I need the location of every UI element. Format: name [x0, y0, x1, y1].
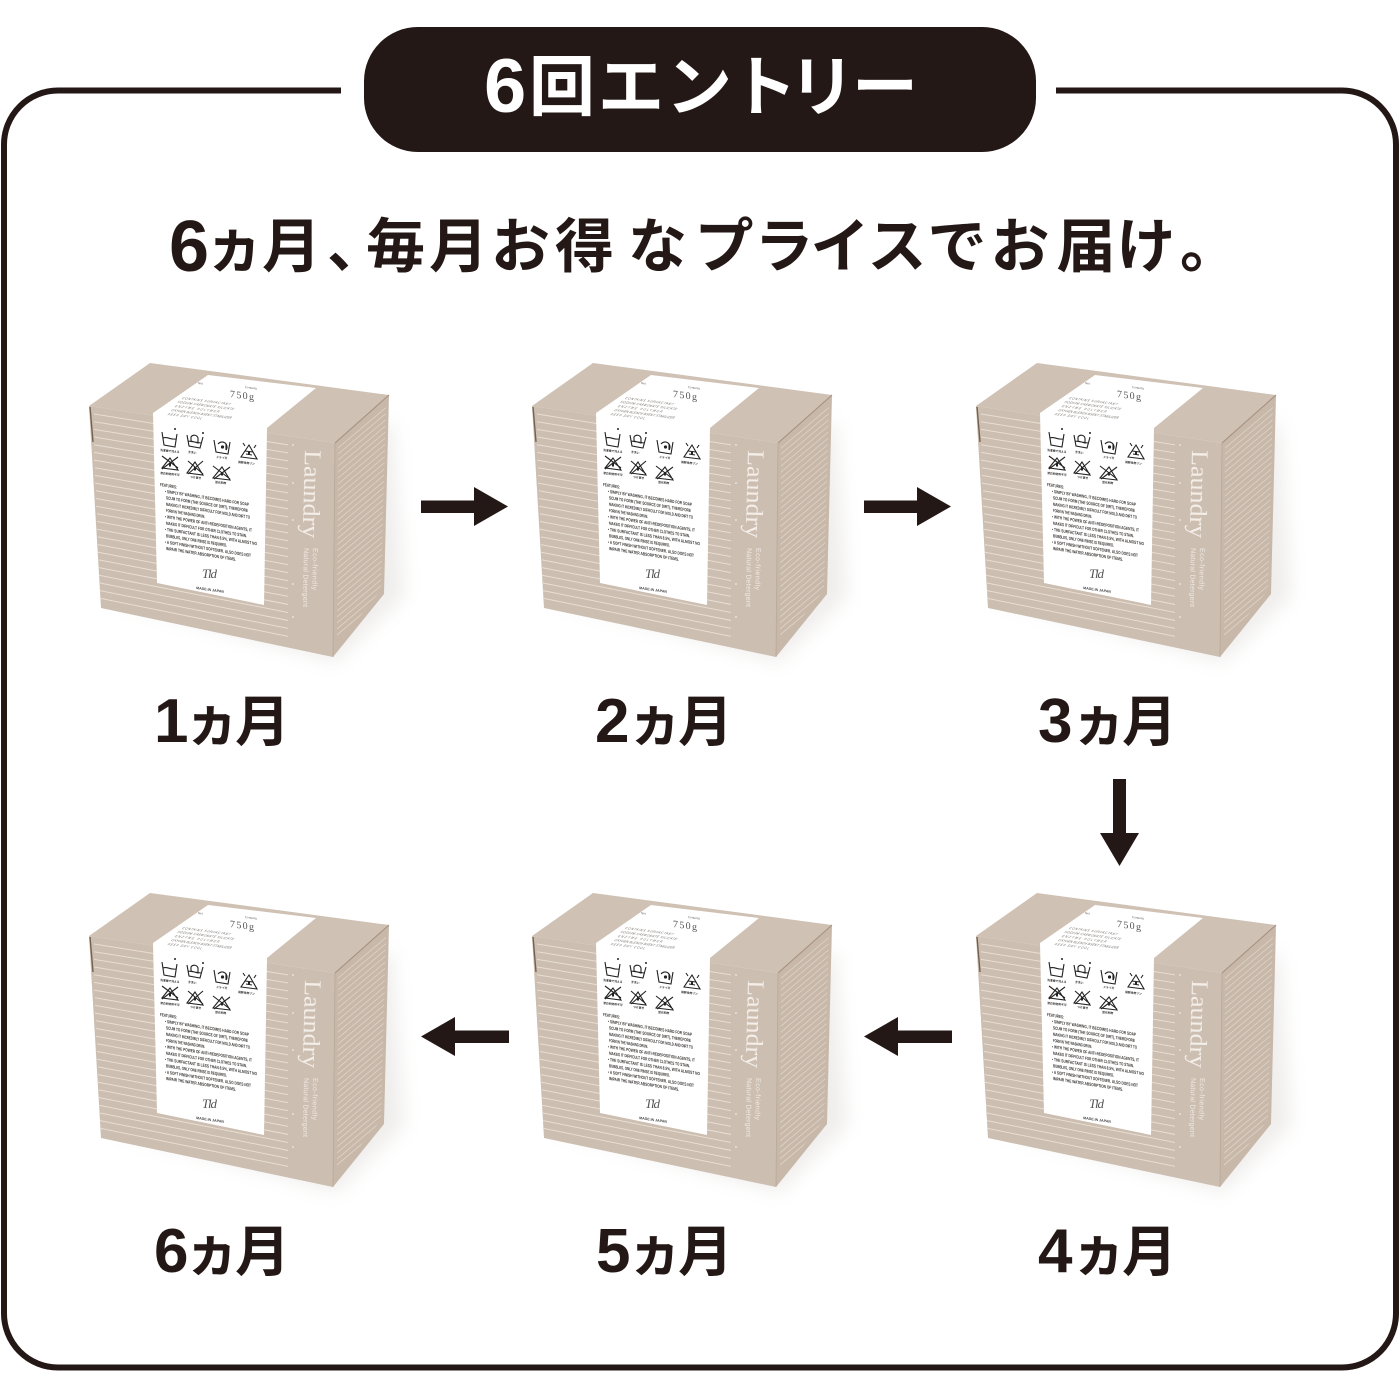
product box: month 2: 弱酸性無リン	[681, 460, 698, 466]
arrow: month 3 to 4	[1100, 779, 1139, 866]
product box: month 2: OXYGEN BLEACH AGENT STABILIZER	[613, 408, 676, 420]
product box: month 1: MAKES IT DIFFICULT FOR OTHER CLOTHES TO STAIN.	[166, 521, 247, 538]
product box: month 1: Laundry	[297, 450, 325, 538]
product box: month 5: SCUM TO FORM (THE SOURCE OF DIRT), THEREFORE	[609, 1025, 691, 1043]
product box: month 4: SCUM TO FORM (THE SOURCE OF DIRT), THEREFORE	[1053, 1025, 1135, 1043]
product box: month 3: ドライ可	[1103, 455, 1115, 460]
product box: month 5: • A SOFT FINISH WITHOUT SOFTENER. ALSO DOES NOT	[608, 1070, 694, 1088]
product box: month 3: 弱酸性無リン	[1125, 460, 1142, 466]
product box: month 3: FORM IN THE WASHING DRUM.	[1053, 508, 1092, 519]
product box: month 4: つけ置き	[1077, 1005, 1089, 1010]
product box: month 5: ENZYME POLYMER	[617, 934, 664, 944]
product box: month 1: OXYGEN BLEACH AGENT STABILIZER	[170, 408, 233, 420]
product box: month 5: 蛍光剤無	[658, 1010, 670, 1015]
product box: month 6: Net	[198, 911, 203, 916]
product box: month 2: • SIMPLY BY WASHING, IT BECOMES HARD FOR SOAP	[608, 489, 692, 507]
product box: month 4: Laundry	[1184, 980, 1212, 1068]
product box: month 6: OXYGEN BLEACH AGENT STABILIZER	[170, 938, 233, 950]
product box: month 2: • THE SURFACTANT IS LESS THAN 8.5%, WITH ALMOST NO	[608, 527, 700, 546]
month label 6: 6	[154, 1217, 188, 1286]
product box: month 6: ドライ可	[216, 985, 228, 990]
product box: month 6: MAKES IT DIFFICULT FOR OTHER CLOTHES TO STAIN.	[166, 1051, 247, 1068]
product box: month 2: Natural Detergent	[744, 548, 752, 607]
product box: month 2: FORM IN THE WASHING DRUM.	[609, 508, 648, 519]
product box: month 1: FORM IN THE WASHING DRUM.	[166, 508, 205, 519]
product box: month 1: 750g	[230, 389, 254, 403]
arrow: month 1 to 2	[421, 487, 508, 526]
product box: month 4: Natural Detergent	[1188, 1078, 1196, 1137]
product box: month 3: つけ置き	[1077, 475, 1089, 480]
product box: month 5: 洗濯機で洗える	[603, 978, 623, 984]
product box: month 3: Laundry	[1184, 450, 1212, 538]
product box: month 4: Eco-friendly	[1197, 1078, 1205, 1121]
product box: month 4: MAKES IT DIFFICULT FOR OTHER CLOTHES TO STAIN.	[1053, 1051, 1134, 1068]
product box: month 6: ENZYME POLYMER	[174, 934, 221, 944]
product box: month 6: IMPAIR THE WATER ABSORPTION OF ITEMS.	[166, 1076, 236, 1092]
product box: month 6: 蛍光剤無	[215, 1010, 227, 1015]
product box: month 2: ドライ可	[659, 455, 671, 460]
product box: month 3: CONTAINS SURFACTANT	[1068, 396, 1120, 406]
product box: month 4: 手洗い	[1075, 980, 1084, 985]
product box: month 4: MAKING IT INCREDIBLY DIFFICULT FOR MOLD AND DIRT TO	[1053, 1032, 1137, 1050]
product box: month 4: ドライ可	[1103, 985, 1115, 990]
product box: month 3: OXYGEN BLEACH AGENT STABILIZER	[1057, 408, 1120, 420]
month label 5: ヵ月	[628, 1221, 733, 1283]
title pill: 6	[484, 44, 526, 129]
product box: month 3: Contents	[1132, 385, 1144, 391]
product box: month 4: Tld	[1089, 1096, 1104, 1111]
product box: month 2: IMPAIR THE WATER ABSORPTION OF ITEMS.	[609, 546, 679, 562]
product box: month 6: FORM IN THE WASHING DRUM.	[166, 1038, 205, 1049]
product box: month 5	[532, 893, 847, 1192]
product box: month 5: FEATURES:	[603, 1012, 620, 1020]
product box: month 3: Net	[1085, 381, 1090, 386]
product box: month 3: • A SOFT FINISH WITHOUT SOFTENER. ALSO DOES NOT	[1052, 540, 1138, 558]
product box: month 3: • SIMPLY BY WASHING, IT BECOMES HARD FOR SOAP	[1052, 489, 1136, 507]
product box: month 1: IMPAIR THE WATER ABSORPTION OF ITEMS.	[166, 546, 236, 562]
product box: month 4: • A SOFT FINISH WITHOUT SOFTENER. ALSO DOES NOT	[1052, 1070, 1138, 1088]
product box: month 4: KEEP DRY COOL	[1053, 942, 1090, 950]
product box: month 6: • A SOFT FINISH WITHOUT SOFTENER. ALSO DOES NOT	[165, 1070, 251, 1088]
product box: month 4: SODIUM CARBONATE SILICATE	[1063, 930, 1123, 941]
month label 2: 2	[595, 687, 629, 756]
product box: month 4: 洗濯機で洗える	[1047, 978, 1067, 984]
month label 6: ヵ月	[185, 1221, 290, 1283]
product box: month 1: FEATURES:	[160, 482, 177, 490]
product box: month 6: CONTAINS SURFACTANT	[181, 926, 233, 936]
product box: month 3: 750g	[1117, 389, 1141, 403]
product box: month 6: 750g	[230, 919, 254, 933]
product box: month 3: MAKING IT INCREDIBLY DIFFICULT FOR MOLD AND DIRT TO	[1053, 502, 1137, 520]
product box: month 3: KEEP DRY COOL	[1053, 412, 1090, 420]
product box: month 2: FEATURES:	[603, 482, 620, 490]
product box: month 5: 750g	[673, 919, 697, 933]
product box: month 1: • THE SURFACTANT IS LESS THAN 8.5%, WITH ALMOST NO	[165, 527, 257, 546]
product box: month 2: 漂白剤使用不可	[603, 471, 623, 477]
product box: month 2: MADE IN JAPAN	[639, 586, 668, 594]
product box: month 4: 750g	[1117, 919, 1141, 933]
product box: month 6: SODIUM CARBONATE SILICATE	[176, 930, 236, 941]
product box: month 5: ドライ可	[659, 985, 671, 990]
product box: month 5: Laundry	[740, 980, 768, 1068]
product box: month 1: Tld	[202, 566, 218, 581]
product box: month 3	[976, 363, 1291, 662]
product box: month 5: Tld	[645, 1096, 660, 1111]
product box: month 1: つけ置き	[190, 475, 202, 480]
product box: month 2: 750g	[673, 389, 697, 403]
product box: month 3: ENZYME POLYMER	[1061, 404, 1108, 414]
product box: month 3: SCUM TO FORM (THE SOURCE OF DIRT), THEREFORE	[1053, 495, 1135, 513]
month label 4: 4	[1038, 1217, 1073, 1286]
product box: month 4: BUBBLES, ONLY ONE RINSE IS REQUIRED.	[1053, 1063, 1114, 1078]
month label 1: 1	[154, 687, 188, 756]
product box: month 3: 漂白剤使用不可	[1047, 471, 1067, 477]
product box: month 6: つけ置き	[190, 1005, 202, 1010]
product box: month 5: OXYGEN BLEACH AGENT STABILIZER	[613, 938, 676, 950]
product box: month 5: Eco-friendly	[753, 1078, 761, 1121]
product box: month 6: Tld	[202, 1096, 218, 1111]
title pill: 回エントリー	[529, 50, 918, 124]
product box: month 5: 弱酸性無リン	[681, 990, 698, 996]
product box: month 4: 漂白剤使用不可	[1047, 1001, 1067, 1007]
product box: month 5: 手洗い	[631, 980, 640, 985]
product box: month 2: 蛍光剤無	[658, 480, 670, 485]
month label 5: 5	[596, 1217, 630, 1286]
product box: month 6: • SIMPLY BY WASHING, IT BECOMES HARD FOR SOAP	[165, 1019, 249, 1037]
product box: month 5: FORM IN THE WASHING DRUM.	[609, 1038, 648, 1049]
product box: month 1: ENZYME POLYMER	[174, 404, 221, 414]
product box: month 1	[89, 363, 404, 662]
product box: month 1: • SIMPLY BY WASHING, IT BECOMES HARD FOR SOAP	[165, 489, 249, 507]
product box: month 2: • A SOFT FINISH WITHOUT SOFTENER. ALSO DOES NOT	[608, 540, 694, 558]
product box: month 3: MADE IN JAPAN	[1083, 586, 1112, 594]
product box: month 6: SCUM TO FORM (THE SOURCE OF DIRT), THEREFORE	[166, 1025, 248, 1043]
product box: month 1: 漂白剤使用不可	[160, 471, 180, 477]
product box: month 1: Contents	[245, 385, 257, 391]
product box: month 2: SODIUM CARBONATE SILICATE	[619, 400, 679, 411]
product box: month 4: IMPAIR THE WATER ABSORPTION OF ITEMS.	[1053, 1076, 1123, 1092]
product box: month 5: Natural Detergent	[744, 1078, 752, 1137]
product box: month 6: Contents	[245, 915, 257, 921]
product box: month 4: • WITH THE POWER OF ANTI-REDEPOSITION AGENTS, IT	[1052, 1044, 1139, 1063]
product box: month 2	[532, 363, 847, 662]
product box: month 6: MADE IN JAPAN	[196, 1116, 225, 1124]
product box: month 4: FEATURES:	[1047, 1012, 1064, 1020]
product box: month 6: Laundry	[297, 980, 325, 1068]
month label 3: ヵ月	[1072, 691, 1177, 753]
product box: month 4: MADE IN JAPAN	[1083, 1116, 1112, 1124]
product box: month 2: • WITH THE POWER OF ANTI-REDEPOSITION AGENTS, IT	[608, 514, 695, 533]
product box: month 1: BUBBLES, ONLY ONE RINSE IS REQUIRED.	[166, 533, 227, 548]
product box: month 5: Net	[641, 911, 646, 916]
product box: month 6: KEEP DRY COOL	[166, 942, 203, 950]
month label 2: ヵ月	[628, 691, 733, 753]
product box: month 6: • THE SURFACTANT IS LESS THAN 8.5%, WITH ALMOST NO	[165, 1057, 257, 1076]
product box: month 1: SCUM TO FORM (THE SOURCE OF DIRT), THEREFORE	[166, 495, 248, 513]
product box: month 4: 弱酸性無リン	[1125, 990, 1142, 996]
product box: month 5: • SIMPLY BY WASHING, IT BECOMES HARD FOR SOAP	[608, 1019, 692, 1037]
product box: month 3: MAKES IT DIFFICULT FOR OTHER CLOTHES TO STAIN.	[1053, 521, 1134, 538]
title pill	[364, 27, 1036, 152]
product box: month 2: KEEP DRY COOL	[609, 412, 646, 420]
product box: month 5: 漂白剤使用不可	[603, 1001, 623, 1007]
product box: month 6: Natural Detergent	[301, 1078, 309, 1137]
product box: month 3: • THE SURFACTANT IS LESS THAN 8.5%, WITH ALMOST NO	[1052, 527, 1144, 546]
arrow: month 2 to 3	[864, 487, 951, 526]
product box: month 6: • WITH THE POWER OF ANTI-REDEPOSITION AGENTS, IT	[165, 1044, 252, 1063]
product box: month 2: SCUM TO FORM (THE SOURCE OF DIRT), THEREFORE	[609, 495, 691, 513]
product box: month 5: • WITH THE POWER OF ANTI-REDEPOSITION AGENTS, IT	[608, 1044, 695, 1063]
product box: month 3: 蛍光剤無	[1102, 480, 1114, 485]
product box: month 4: • SIMPLY BY WASHING, IT BECOMES HARD FOR SOAP	[1052, 1019, 1136, 1037]
product box: month 5: つけ置き	[633, 1005, 645, 1010]
arrow: month 4 to 5	[864, 1017, 952, 1056]
product box: month 1: 手洗い	[188, 450, 197, 455]
product box: month 1: 弱酸性無リン	[238, 460, 255, 466]
product box: month 1: MAKING IT INCREDIBLY DIFFICULT FOR MOLD AND DIRT TO	[166, 502, 250, 520]
product box: month 5: KEEP DRY COOL	[609, 942, 646, 950]
product box: month 6: Eco-friendly	[310, 1078, 318, 1121]
product box: month 1: • A SOFT FINISH WITHOUT SOFTENER. ALSO DOES NOT	[165, 540, 251, 558]
product box: month 2: 手洗い	[631, 450, 640, 455]
product box: month 6: 漂白剤使用不可	[160, 1001, 180, 1007]
month label 1: ヵ月	[185, 691, 290, 753]
product box: month 2: Laundry	[740, 450, 768, 538]
product box: month 5: BUBBLES, ONLY ONE RINSE IS REQUIRED.	[609, 1063, 670, 1078]
product box: month 1: 洗濯機で洗える	[160, 448, 180, 454]
heading: 6	[169, 207, 209, 287]
product box: month 5: MAKES IT DIFFICULT FOR OTHER CLOTHES TO STAIN.	[609, 1051, 690, 1068]
product box: month 1: Eco-friendly	[310, 548, 318, 591]
product box: month 4: OXYGEN BLEACH AGENT STABILIZER	[1057, 938, 1120, 950]
product box: month 2: CONTAINS SURFACTANT	[624, 396, 676, 406]
product box: month 1: MADE IN JAPAN	[196, 586, 225, 594]
product box: month 1: SODIUM CARBONATE SILICATE	[176, 400, 236, 411]
product box: month 1: 蛍光剤無	[215, 480, 227, 485]
product box: month 1: Net	[198, 381, 203, 386]
arrow: month 5 to 6	[421, 1017, 509, 1056]
product box: month 2: つけ置き	[633, 475, 645, 480]
product box: month 2: BUBBLES, ONLY ONE RINSE IS REQUIRED.	[609, 533, 670, 548]
product box: month 3: 手洗い	[1075, 450, 1084, 455]
product box: month 5: MADE IN JAPAN	[639, 1116, 668, 1124]
product box: month 4: ENZYME POLYMER	[1061, 934, 1108, 944]
product box: month 4: • THE SURFACTANT IS LESS THAN 8.5%, WITH ALMOST NO	[1052, 1057, 1144, 1076]
product box: month 2: Net	[641, 381, 646, 386]
month label 3: 3	[1038, 687, 1072, 756]
product box: month 2: MAKES IT DIFFICULT FOR OTHER CLOTHES TO STAIN.	[609, 521, 690, 538]
product box: month 5: IMPAIR THE WATER ABSORPTION OF ITEMS.	[609, 1076, 679, 1092]
product box: month 2: Eco-friendly	[753, 548, 761, 591]
product box: month 6: FEATURES:	[160, 1012, 177, 1020]
product box: month 1: Natural Detergent	[301, 548, 309, 607]
product box: month 3: FEATURES:	[1047, 482, 1064, 490]
product box: month 6: 洗濯機で洗える	[160, 978, 180, 984]
product box: month 2: Tld	[645, 566, 660, 581]
product box: month 5: MAKING IT INCREDIBLY DIFFICULT FOR MOLD AND DIRT TO	[609, 1032, 693, 1050]
product box: month 3: SODIUM CARBONATE SILICATE	[1063, 400, 1123, 411]
product box: month 6: 弱酸性無リン	[238, 990, 255, 996]
product box: month 4: Net	[1085, 911, 1090, 916]
product box: month 3: Tld	[1089, 566, 1104, 581]
product box: month 3: Natural Detergent	[1188, 548, 1196, 607]
month label 4: ヵ月	[1072, 1221, 1177, 1283]
product box: month 4	[976, 893, 1291, 1192]
product box: month 3: 洗濯機で洗える	[1047, 448, 1067, 454]
product box: month 1: KEEP DRY COOL	[166, 412, 203, 420]
product box: month 2: 洗濯機で洗える	[603, 448, 623, 454]
product box: month 5: • THE SURFACTANT IS LESS THAN 8.5%, WITH ALMOST NO	[608, 1057, 700, 1076]
product box: month 1: CONTAINS SURFACTANT	[181, 396, 233, 406]
product box: month 6: 手洗い	[188, 980, 197, 985]
product box: month 4: FORM IN THE WASHING DRUM.	[1053, 1038, 1092, 1049]
heading: ヵ月、毎月お得なプライスでお届け。	[206, 214, 1239, 280]
product box: month 6: BUBBLES, ONLY ONE RINSE IS REQUIRED.	[166, 1063, 227, 1078]
product box: month 4: CONTAINS SURFACTANT	[1068, 926, 1120, 936]
product box: month 5: Contents	[688, 915, 700, 921]
product box: month 1: ドライ可	[216, 455, 228, 460]
product box: month 4: 蛍光剤無	[1102, 1010, 1114, 1015]
product box: month 5: CONTAINS SURFACTANT	[624, 926, 676, 936]
product box: month 2: ENZYME POLYMER	[617, 404, 664, 414]
product box: month 3: • WITH THE POWER OF ANTI-REDEPOSITION AGENTS, IT	[1052, 514, 1139, 533]
product box: month 5: SODIUM CARBONATE SILICATE	[619, 930, 679, 941]
product box: month 3: BUBBLES, ONLY ONE RINSE IS REQUIRED.	[1053, 533, 1114, 548]
product box: month 2: Contents	[688, 385, 700, 391]
product box: month 1: • WITH THE POWER OF ANTI-REDEPOSITION AGENTS, IT	[165, 514, 252, 533]
product box: month 6: MAKING IT INCREDIBLY DIFFICULT FOR MOLD AND DIRT TO	[166, 1032, 250, 1050]
product box: month 3: IMPAIR THE WATER ABSORPTION OF ITEMS.	[1053, 546, 1123, 562]
product box: month 2: MAKING IT INCREDIBLY DIFFICULT FOR MOLD AND DIRT TO	[609, 502, 693, 520]
product box: month 6	[89, 893, 404, 1192]
product box: month 4: Contents	[1132, 915, 1144, 921]
product box: month 3: Eco-friendly	[1197, 548, 1205, 591]
